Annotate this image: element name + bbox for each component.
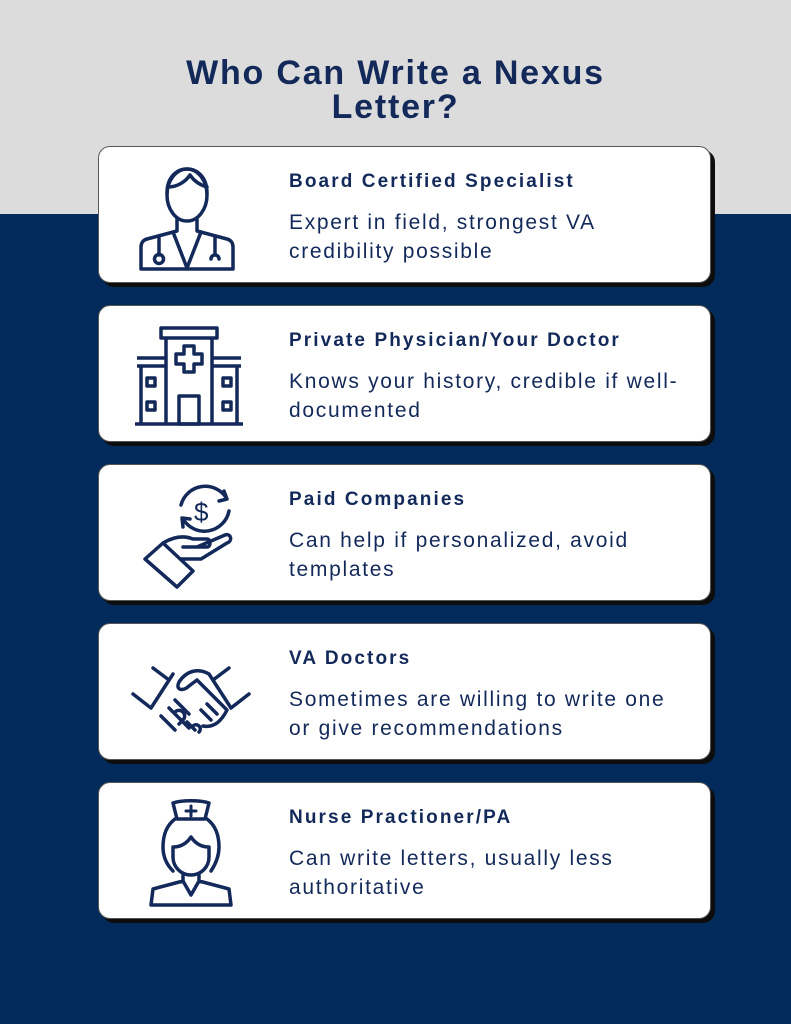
description <box>289 370 678 422</box>
description <box>289 847 614 899</box>
icon: hand with dollar <box>143 484 232 589</box>
description: Sometimes are willing to write one <box>289 688 665 711</box>
description <box>289 211 596 263</box>
description: templates <box>289 558 395 581</box>
title: Letter? <box>332 88 459 126</box>
heading: Paid Companies <box>289 489 466 510</box>
description: Can help if personalized, avoid <box>289 529 629 552</box>
description <box>289 529 629 581</box>
description: Can write letters, usually less <box>289 847 614 870</box>
description: authoritative <box>289 876 426 899</box>
card: VA doctors <box>98 623 711 760</box>
card: board certified specialist <box>98 146 711 283</box>
description: documented <box>289 399 422 422</box>
heading: Private Physician/Your Doctor <box>289 330 621 351</box>
description: credibility possible <box>289 240 493 263</box>
icon: handshake <box>131 666 251 734</box>
description: Expert in field, strongest VA <box>289 211 596 234</box>
icon: hand with dollar: $ <box>194 497 209 527</box>
heading: Nurse Practioner/PA <box>289 807 512 828</box>
card: nurse practitioner <box>98 782 711 919</box>
icon: hospital <box>135 326 243 426</box>
title: Who Can Write a Nexus <box>186 54 605 92</box>
heading: Board Certified Specialist <box>289 171 575 192</box>
heading: VA Doctors <box>289 648 411 669</box>
card: paid companies <box>98 464 711 601</box>
description: or give recommendations <box>289 717 564 740</box>
description <box>289 688 665 740</box>
icon: doctor <box>139 167 235 271</box>
title <box>186 54 605 126</box>
description: Knows your history, credible if well- <box>289 370 678 393</box>
icon: nurse <box>149 799 233 907</box>
card: private physician <box>98 305 711 442</box>
